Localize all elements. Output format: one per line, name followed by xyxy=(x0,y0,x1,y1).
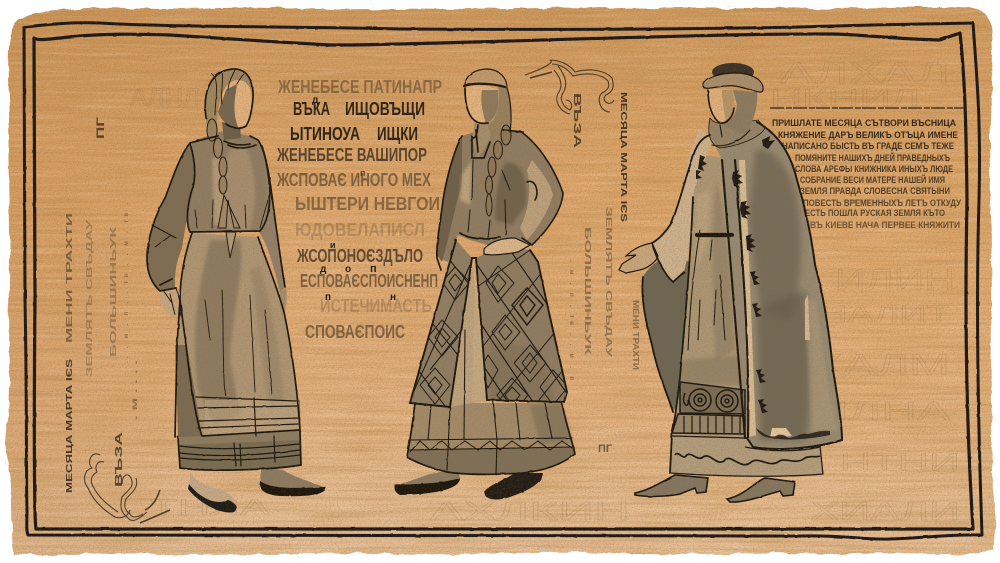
faint pencil lettering on paper: ТНЛА xyxy=(150,495,271,520)
manuscript text block: upper right: НАПИСАНО БЫСТЬ ВЪ ГРАДЕ СЕМЪ ТЕЖЕ xyxy=(782,141,954,152)
manuscript text block: upper right: ПОМЯНИТЕ НАШИХЪ ДНЕЙ ПРАВЕДНЫХЪ xyxy=(795,152,950,164)
manuscript text block: centre: ЮДОВЕЛАПИСЛ xyxy=(295,220,425,240)
figure 2 braid xyxy=(486,125,511,216)
vertical manuscript text: centre right margin xyxy=(568,92,640,455)
manuscript text block: centre: н xyxy=(390,292,396,303)
vertical manuscript text: left margin: ЗЕМЛЯТЪ СВЪДАУ xyxy=(85,218,94,377)
manuscript text block: centre: ЕСПОВАЄСПОИСНЕНП xyxy=(300,271,438,291)
faint pencil lettering on paper xyxy=(130,57,960,526)
manuscript text block: centre: п xyxy=(325,292,331,303)
faint pencil lettering on paper: АЛХАЛ xyxy=(780,57,950,90)
figure 3 fur hat xyxy=(703,63,763,92)
vertical manuscript text: left margin: ВЪЗА xyxy=(114,432,125,487)
manuscript text block: centre: п xyxy=(370,263,377,275)
vertical manuscript text: left margin: ПГ xyxy=(95,116,107,139)
figure 1 shoes xyxy=(188,467,326,512)
vertical manuscript text: left margin: МЕНИ ТРАХТИ xyxy=(65,212,74,343)
manuscript text block: upper right: СОБРАНИЕ ВЕСИ МАТЕРЕ НАШЕЙ ИМЯ xyxy=(800,174,945,186)
figure 3 cloak xyxy=(710,122,842,449)
manuscript text block: centre: ЫТИНОУА xyxy=(290,124,360,144)
figure 1 apron xyxy=(177,233,300,436)
figure 2 neck, face, head-dress xyxy=(472,118,492,158)
faint pencil lettering on paper: АХЛКИН xyxy=(430,496,630,526)
vertical manuscript text: centre right margin: ПГ xyxy=(598,443,613,455)
manuscript text block: upper right: ЗЕМЛЯ ПРАВДА СЛОВЕСНА СВЯТЫНИ xyxy=(800,186,950,197)
figure 3 robe hem xyxy=(670,430,823,476)
vertical manuscript text: left margin: МЕСЯЦА МАРТА ІЄS xyxy=(65,358,74,493)
figure 1 neck, face, hair xyxy=(222,122,241,140)
manuscript text block: centre: ЖЕНЕБЕСЕ ВАШИПОР xyxy=(276,145,427,165)
figure 3 arm xyxy=(652,128,712,282)
manuscript text block: upper right: КНЯЖЕНИЕ ДАРЪ ВЕЛИКЪ ОТЪЦА ИМЕНЕ xyxy=(778,130,958,141)
faint pencil lettering on paper: НАЛИТ xyxy=(820,301,951,328)
figure 3 neck, scarf, face xyxy=(709,112,765,148)
figure 3 boots xyxy=(635,475,795,502)
figure 1 under skirt xyxy=(178,400,301,470)
vertical manuscript text: centre right margin: ВЪЗА xyxy=(571,93,582,148)
manuscript text block: centre: д xyxy=(320,264,327,275)
manuscript text block: centre: ЖСПОВАЄ ИНОГО МЕХ xyxy=(276,170,431,190)
vertical manuscript text: left margin: . м . . . . xyxy=(130,360,139,420)
figure 2 tunic and sleeves xyxy=(441,128,563,262)
manuscript text block: upper right xyxy=(770,108,964,231)
ornament: top flourish xyxy=(525,60,614,114)
figure 1 tunic and sleeves xyxy=(187,131,268,232)
figure 2 hand xyxy=(484,238,530,255)
figure 3 cloak trim xyxy=(696,136,830,439)
faint pencil lettering on paper: АЛНЛ xyxy=(130,84,200,111)
vertical manuscript text: left margin xyxy=(65,116,139,493)
manuscript text block: centre: ИЩКИ xyxy=(377,124,418,144)
manuscript text block: centre: ИСТЕЧИМАСТЬ xyxy=(320,296,432,316)
faint pencil lettering on paper: ИЛИН xyxy=(835,264,955,297)
manuscript text block: upper right: ПОВЕСТЬ ВРЕМЕННЫХЪ ЛЕТЪ ОТКУДУ xyxy=(803,198,961,209)
figure 1 hands xyxy=(160,288,181,317)
vertical manuscript text: centre right margin: БОЛЬШИНЬУК xyxy=(583,227,592,355)
figure 3 robe xyxy=(672,153,748,440)
vertical manuscript text: left margin: .. . м . п . . тв . . м . тв . xyxy=(124,203,130,363)
manuscript text block: upper right: ПРИШЛАТЕ МЕСЯЦА СЪТВОРИ ВЪСНИЦА xyxy=(772,118,956,129)
figure 2 coat panels xyxy=(476,249,567,402)
manuscript text block: centre: и xyxy=(330,240,336,250)
vertical manuscript text: centre right margin: . м . п . тв . . м . п xyxy=(568,260,574,380)
figure 3 big sleeve xyxy=(642,255,690,412)
manuscript text block: centre: ИЩОВЪЩИ xyxy=(345,99,425,119)
manuscript text block: centre: ВЪКА xyxy=(293,99,330,119)
manuscript text block: upper right: СЛОВА АРЕФЫ КНИЖНИКА ИНЫХЪ ЛЮДЕ xyxy=(795,164,953,175)
manuscript text block: upper right: ВЪ КИЕВЕ НАЧА ПЕРВЕЕ КНЯЖИТИ xyxy=(810,220,960,231)
manuscript text block: centre: о xyxy=(345,264,351,275)
figure 2 coat diamond pattern left xyxy=(414,261,470,406)
figure 2 skirt xyxy=(407,403,575,474)
figure 2: woman in patterned overcoat xyxy=(395,69,575,499)
faint pencil lettering on paper: НТНИ xyxy=(840,449,960,476)
figure 3 ink outlines xyxy=(642,90,842,473)
manuscript text block: centre: ЫШТЕРИ НЕВГОИ xyxy=(295,194,440,214)
faint pencil lettering on paper: НКНИЛ xyxy=(770,85,920,112)
faint pencil lettering on paper: ХИАЛИ xyxy=(810,496,960,526)
manuscript text block: centre: п xyxy=(360,168,365,178)
figure 3 hand xyxy=(619,243,658,273)
figure 1: woman in tunic and apron xyxy=(147,69,326,512)
vertical manuscript text: centre right margin: МЕСЯЦА МАРТА ІЄS xyxy=(619,92,628,223)
manuscript text block: centre: ЖСОПОНОЄЗДЪЛО xyxy=(296,246,423,266)
figure 3 hem band and ornaments xyxy=(671,382,823,476)
manuscript text block: centre: д xyxy=(312,95,319,106)
manuscript text block: centre: ЖЕНЕБЕСЕ ПАТИНАПР xyxy=(277,77,442,97)
faint pencil lettering on paper: ХАЛМ xyxy=(810,349,950,382)
vertical manuscript text: centre right margin: ЗЕМЛЯТЪ СВЪДАУ xyxy=(604,207,613,359)
faint pencil lettering on paper: АНЛНА xyxy=(780,396,951,426)
figure 2 ink outlines xyxy=(407,69,575,475)
figure 2 shoes xyxy=(395,470,543,499)
rule line above right text xyxy=(770,107,964,109)
figure 1 ink outlines xyxy=(147,69,301,470)
figure 1 braid xyxy=(207,119,240,258)
manuscript text block: upper right: ЕСТЬ ПОШЛА РУСКАЯ ЗЕМЛЯ КЪТО xyxy=(805,208,945,219)
vertical manuscript text: left margin: БОЛЬШИНЬУК xyxy=(109,227,118,357)
figure 3: woman in fur hat and cloak xyxy=(619,63,842,502)
manuscript text block: centre: СПОВАЄПОИС xyxy=(305,322,405,342)
figure 2 coat diamond pattern right xyxy=(477,250,566,402)
vertical manuscript text: centre right margin: МЕНИ ТРАХТИ xyxy=(631,300,640,370)
ornament: left flourish xyxy=(85,454,170,523)
manuscript text block: centre xyxy=(276,77,442,342)
